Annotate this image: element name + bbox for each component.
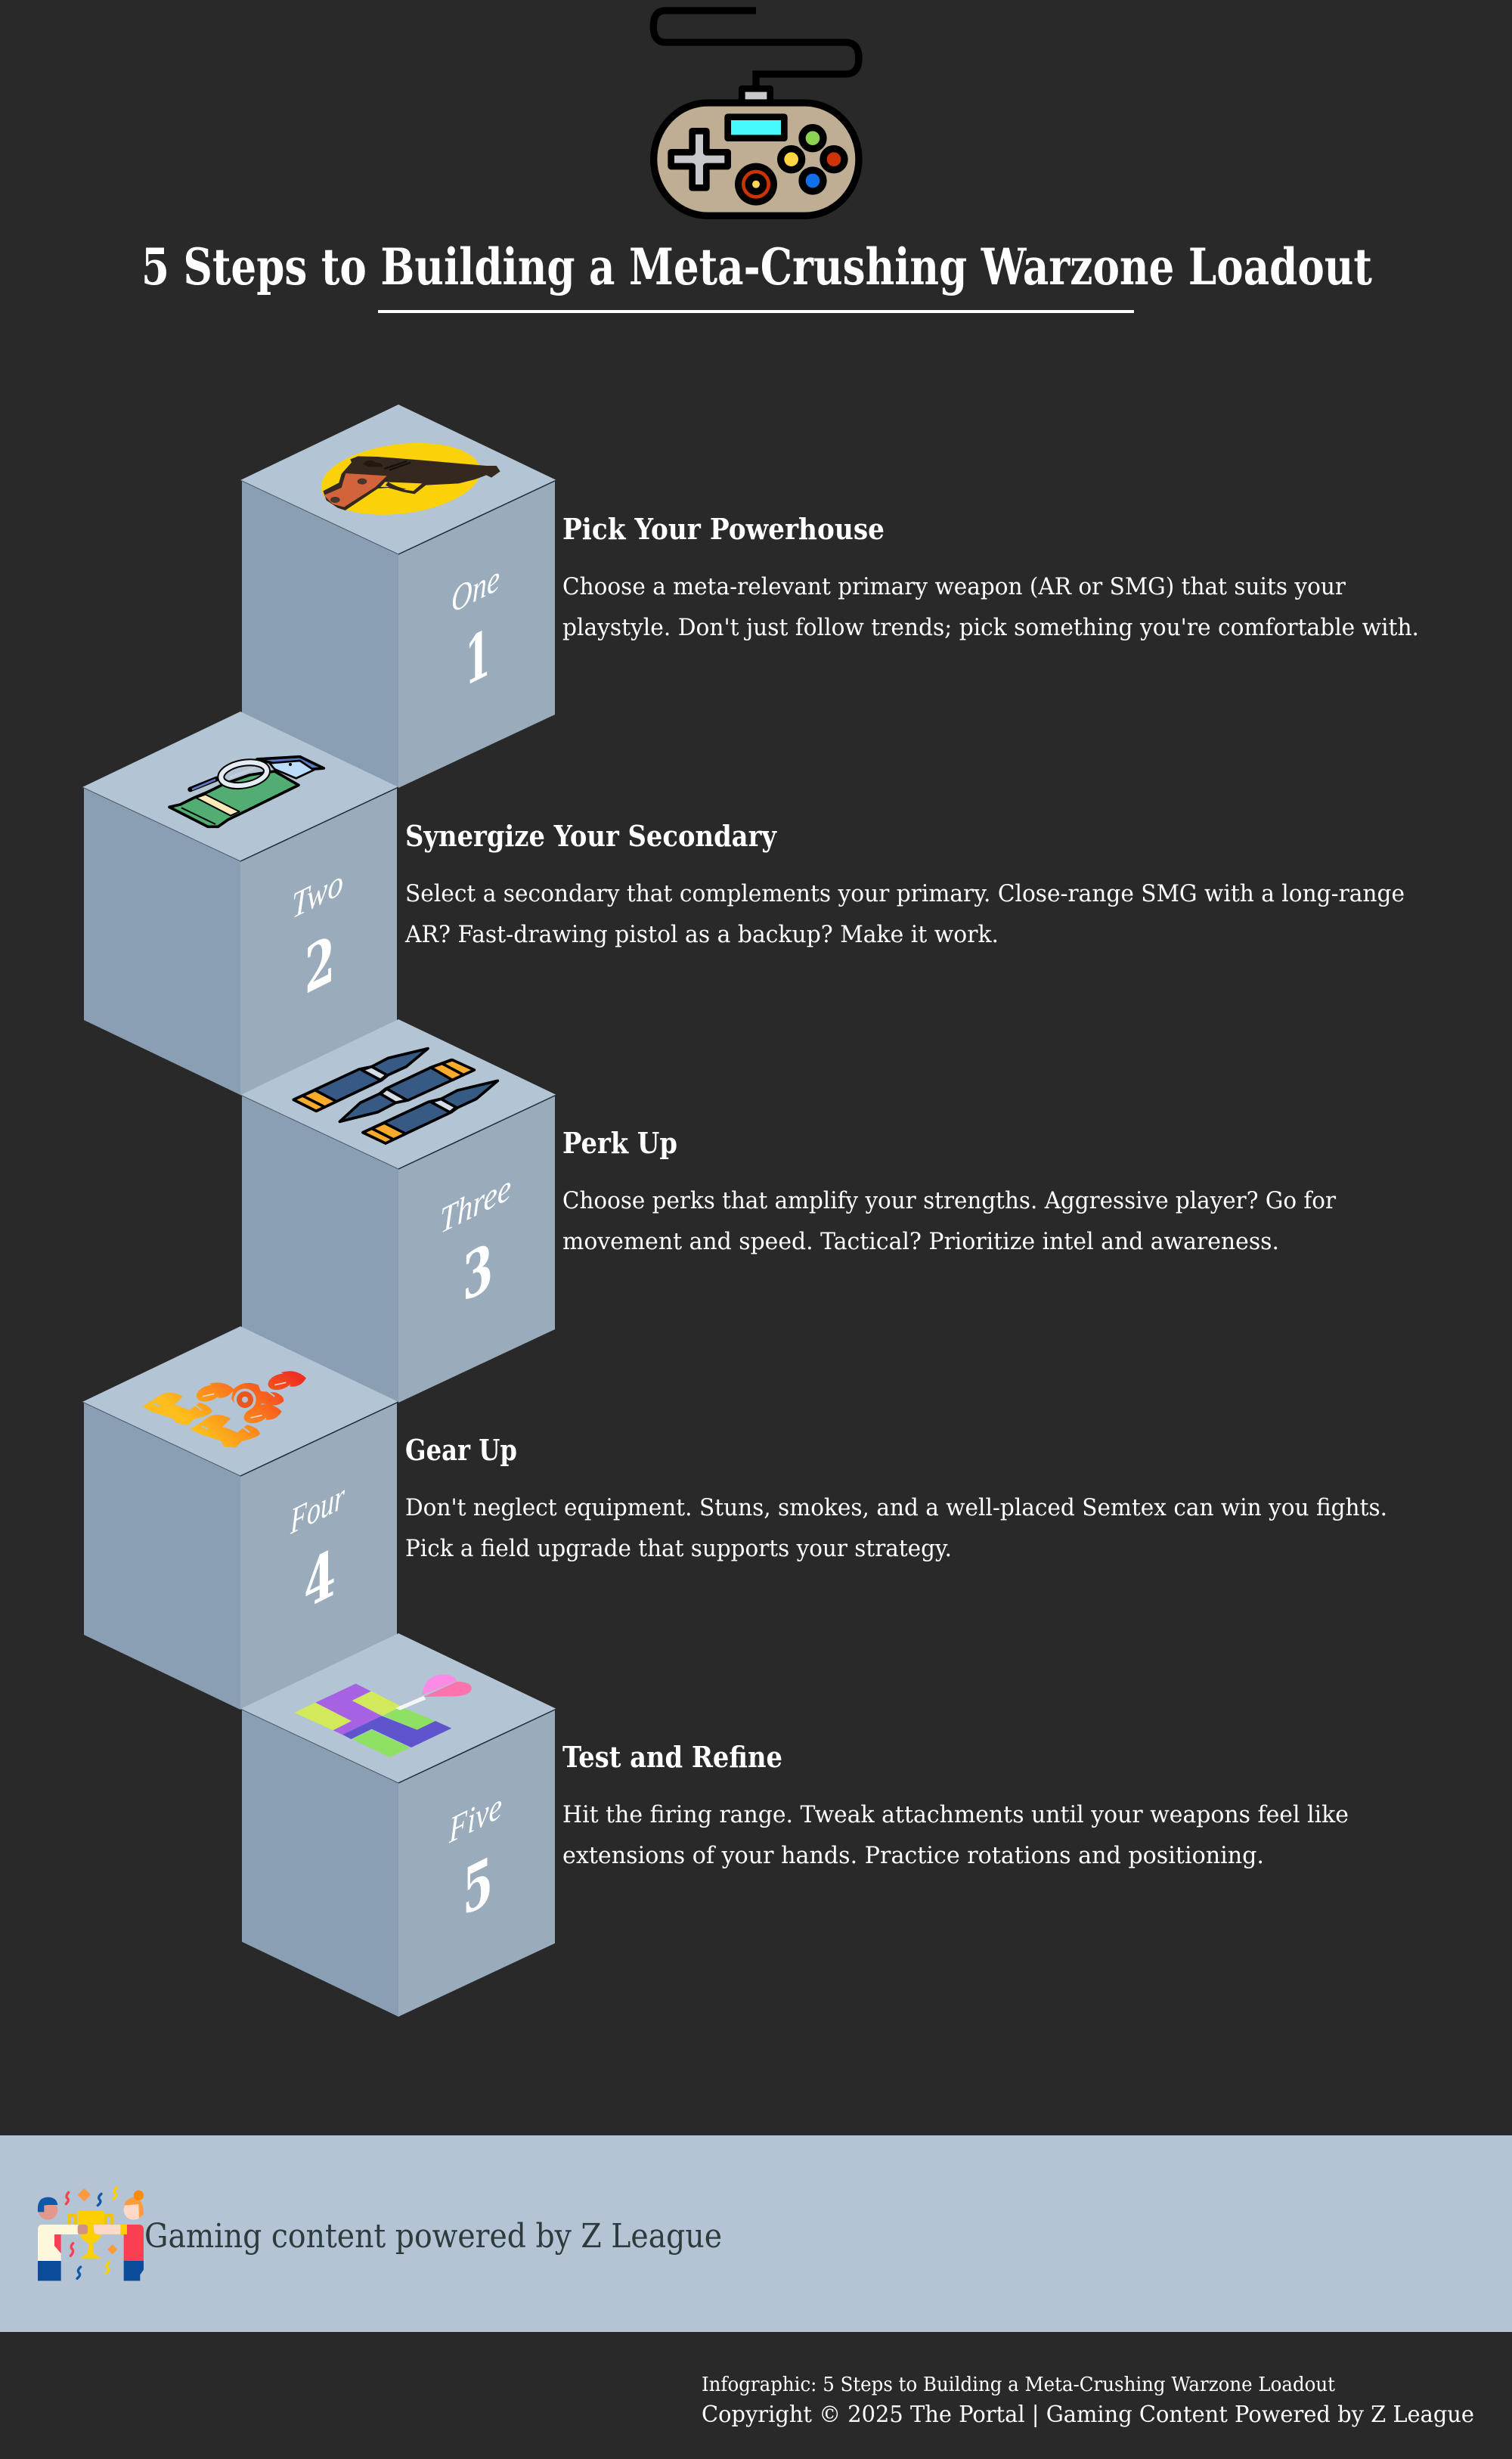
step label: Two: Two [292,862,343,927]
step 3 description: Choose perks that amplify your strengths. Aggressive player? Go for [562,1187,1336,1214]
step 5 cube [240,1633,556,2017]
step number: 1: 1 [465,614,491,702]
step 5 description: extensions of your hands. Practice rotations and positioning. [562,1842,1264,1869]
step number: 4: 4 [304,1534,336,1625]
step 1 heading: Pick Your Powerhouse [562,512,885,546]
step 2 description: Select a secondary that complements your primary. Close-range SMG with a long-range [405,880,1405,907]
step 4 description [405,1494,1387,1562]
step 5 description: Hit the firing range. Tweak attachments until your weapons feel like [562,1801,1349,1828]
step 1 description: Choose a meta-relevant primary weapon (AR or SMG) that suits your [562,573,1346,600]
step 5 description [562,1801,1349,1869]
game controller icon [653,11,859,216]
step 5 heading: Test and Refine [562,1740,782,1774]
step 3 cube [240,1019,556,1403]
icon: dart and blocks [294,1674,472,1757]
copyright line: Copyright © 2025 The Portal | Gaming Content Powered by Z League [702,2402,1474,2428]
step 1 cube [240,405,556,788]
icon: team with gear [142,1371,306,1447]
step number: 2: 2 [305,920,335,1010]
step 2 description: AR? Fast-drawing pistol as a backup? Make it work. [404,921,999,948]
icon: bullets [293,1049,497,1143]
step 4 heading: Gear Up [405,1433,517,1467]
step 4 description: Don't neglect equipment. Stuns, smokes, and a well-placed Semtex can win you fights. [405,1494,1387,1521]
step 2 description [404,880,1405,948]
step label: Three: Three [440,1167,511,1242]
step label: Five: Five [448,1785,502,1852]
footer band [0,2135,1512,2332]
step number: 5: 5 [463,1842,493,1932]
icon: grenade [169,757,324,826]
step label: One: One [451,558,500,622]
icon: two people with trophy [38,2188,144,2281]
step 1 description [562,573,1419,641]
step 2 heading: Synergize Your Secondary [405,819,777,853]
icon: pistol [317,435,500,523]
footer band text: Gaming content powered by Z League [144,2217,722,2256]
step 4 description: Pick a field upgrade that supports your strategy. [405,1535,952,1562]
step 3 heading: Perk Up [562,1126,677,1160]
step 2 cube [82,712,398,1095]
step 4 cube [82,1326,398,1710]
step 1 description: playstyle. Don't just follow trends; pick something you're comfortable with. [562,614,1419,641]
step 3 description [562,1187,1336,1255]
credit line: Infographic: 5 Steps to Building a Meta-Crushing Warzone Loadout [702,2374,1336,2396]
step 3 description: movement and speed. Tactical? Prioritize intel and awareness. [562,1228,1279,1255]
step number: 3: 3 [463,1228,493,1318]
step label: Four: Four [290,1475,345,1543]
